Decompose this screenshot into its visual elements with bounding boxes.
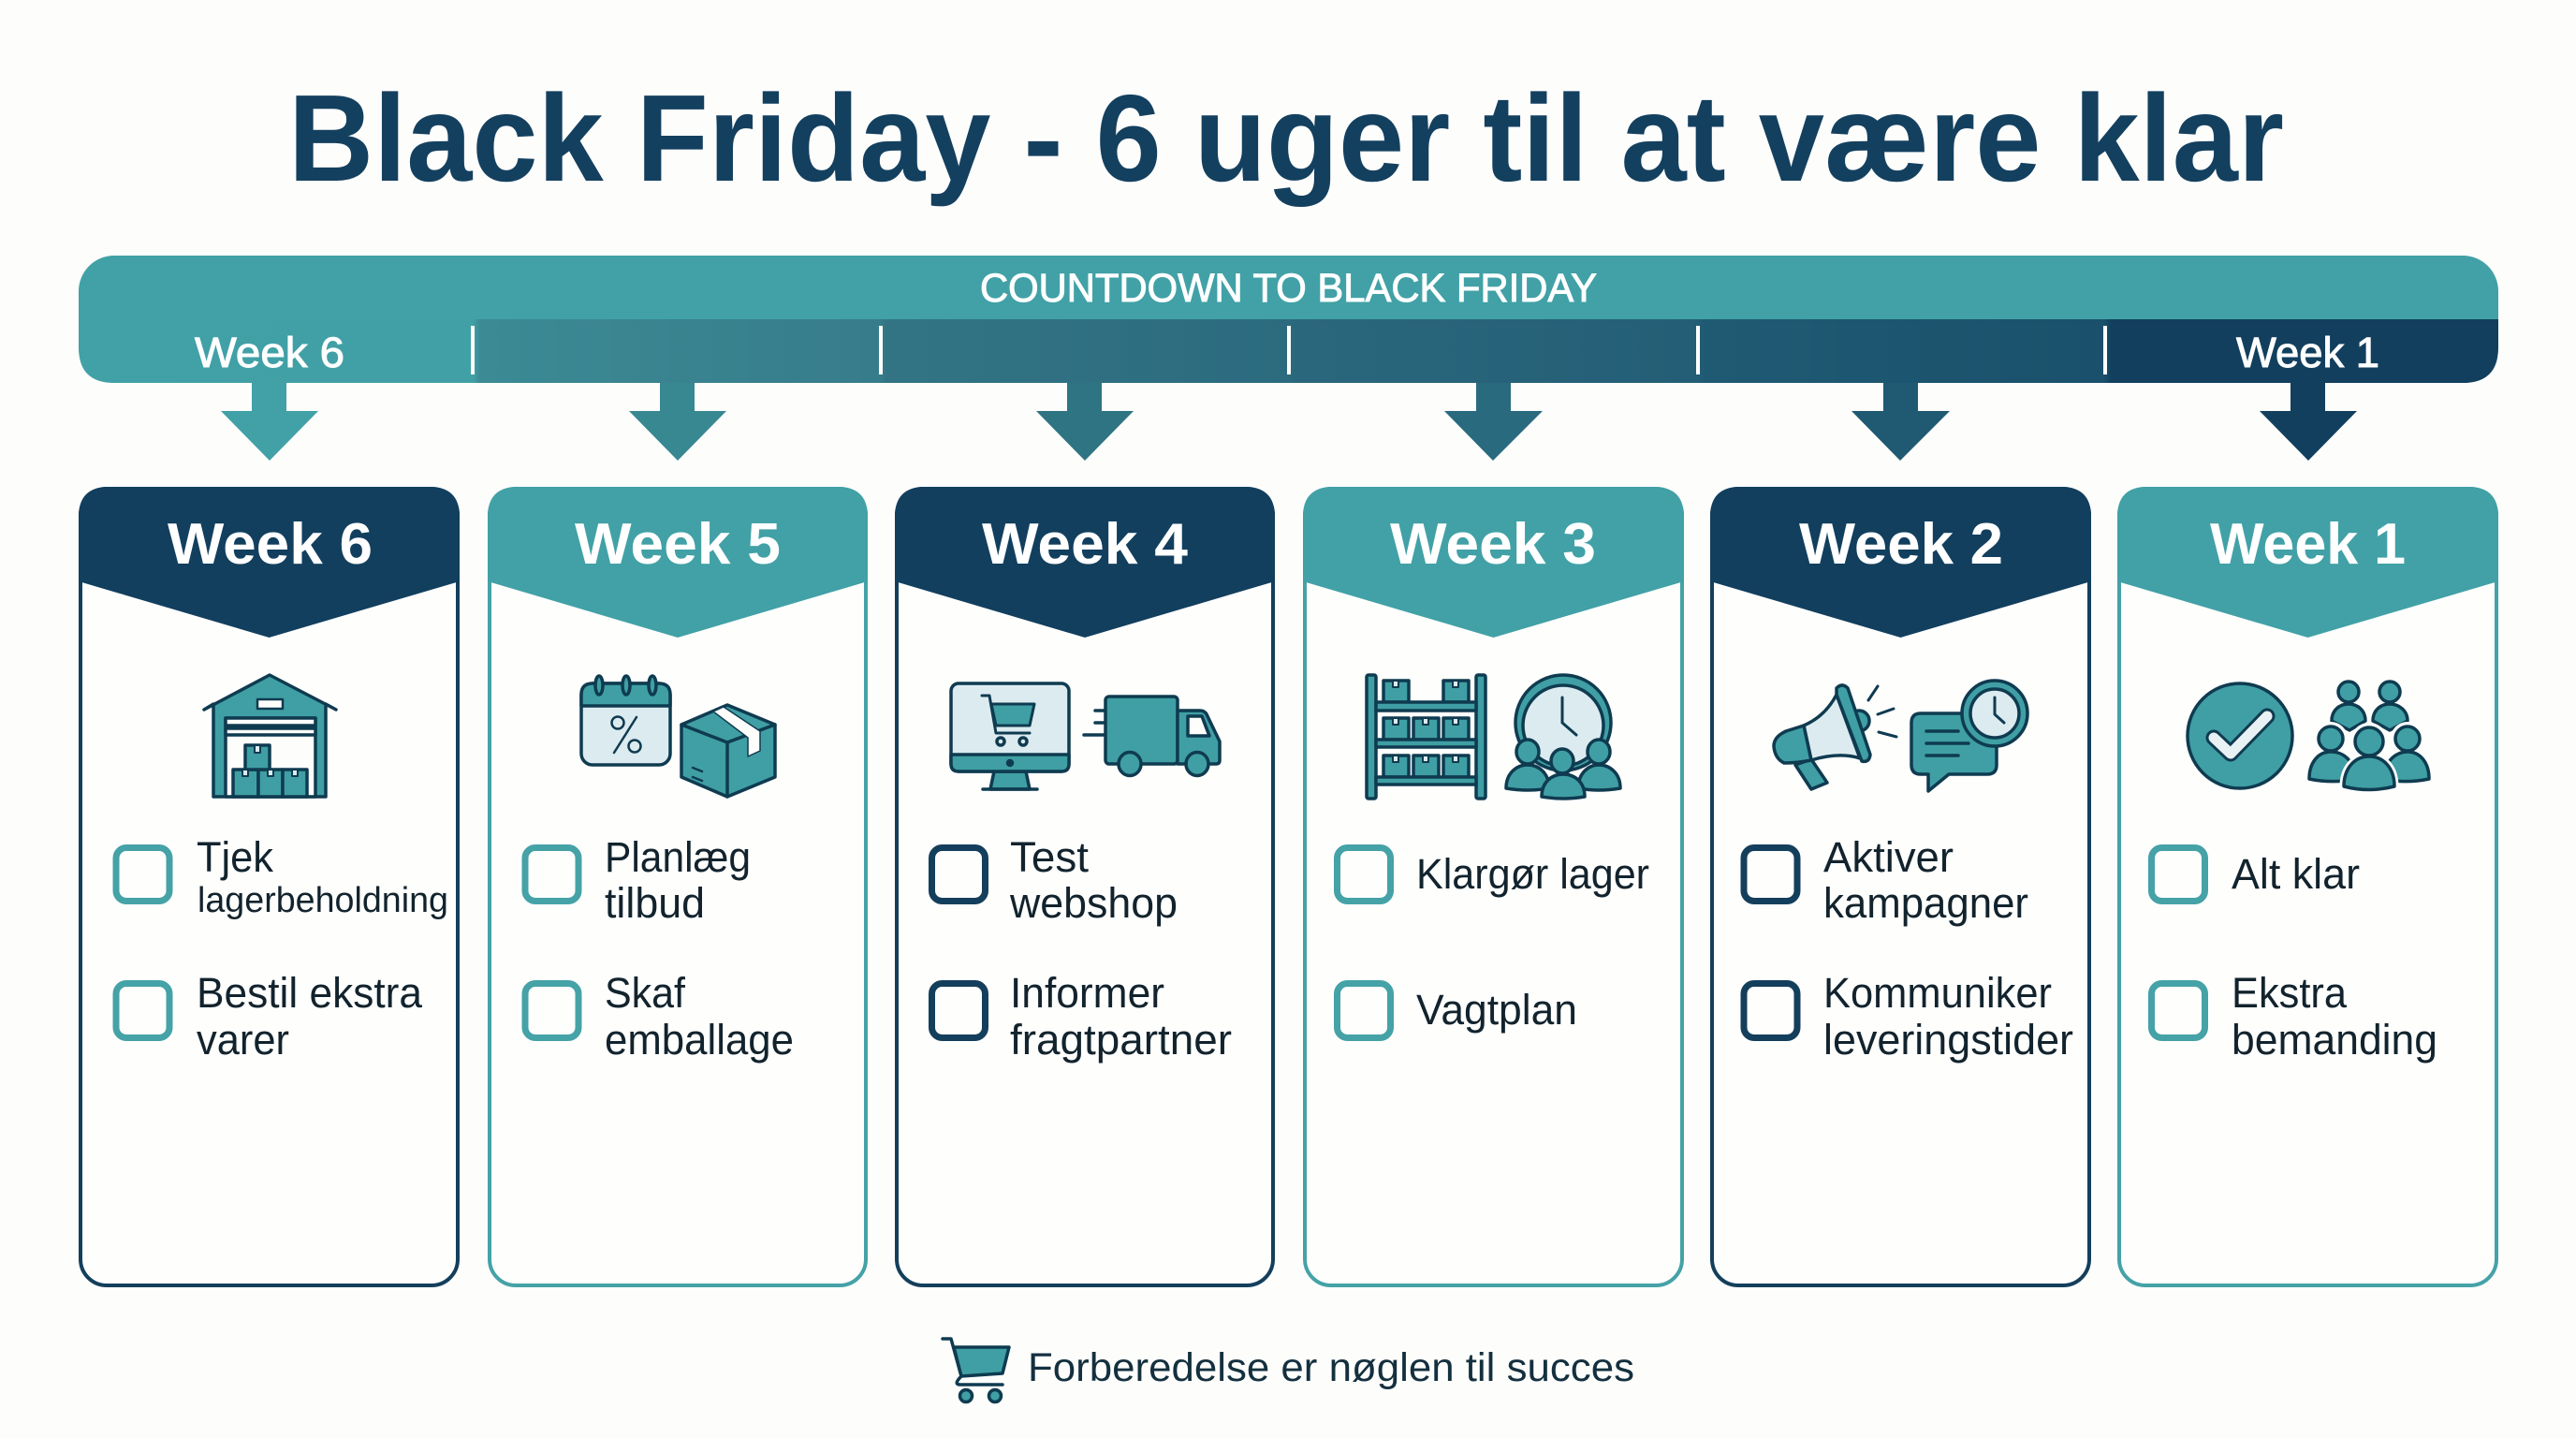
- icon: webshop and truck: [951, 683, 1220, 789]
- task: [2232, 969, 2437, 1064]
- task: leveringstider: [1823, 1016, 2073, 1064]
- checkbox: [1744, 983, 1797, 1037]
- task: [605, 969, 794, 1064]
- task: webshop: [1009, 879, 1178, 927]
- checkbox: [932, 848, 985, 901]
- task: [1009, 833, 1178, 927]
- title: Black Friday - 6 uger til at være klar: [288, 69, 2284, 207]
- checkbox: [525, 848, 578, 901]
- task: Klargør lager: [1416, 850, 1649, 898]
- task: Tjek: [197, 833, 273, 881]
- task: Bestil ekstra: [197, 969, 423, 1017]
- heading: Week 5: [575, 512, 781, 577]
- checkbox: [525, 983, 578, 1037]
- task: [197, 969, 423, 1064]
- heading: Week 2: [1799, 512, 2003, 577]
- panel: week 1: [2117, 487, 2498, 1285]
- task: Vagtplan: [1416, 986, 1577, 1034]
- checkbox: [116, 848, 169, 901]
- bar heading: COUNTDOWN TO BLACK FRIDAY: [980, 266, 1597, 311]
- panel: week 5: [488, 487, 868, 1285]
- icon: shelves and clock team: [1367, 675, 1620, 799]
- arrow: week 3: [1444, 383, 1543, 461]
- bar label: week 1: Week 1: [2236, 329, 2379, 376]
- task: Aktiver: [1823, 833, 1954, 881]
- panel: week 2: [1710, 487, 2091, 1285]
- task: emballage: [605, 1016, 794, 1064]
- panel: week 3: [1303, 487, 1684, 1285]
- task: tilbud: [605, 879, 705, 927]
- task: Informer: [1010, 969, 1164, 1017]
- task: [605, 833, 751, 927]
- heading: Week 1: [2210, 512, 2406, 577]
- arrow: week 4: [1036, 383, 1134, 461]
- icon: cart: [943, 1339, 1009, 1402]
- checkbox: [932, 983, 985, 1037]
- checkbox: [116, 983, 169, 1037]
- icon: check and team: [2188, 682, 2429, 790]
- heading: Week 4: [982, 512, 1189, 577]
- task: Test: [1010, 833, 1090, 881]
- heading: Week 3: [1390, 512, 1596, 577]
- checkbox: [2151, 848, 2205, 901]
- task: kampagner: [1823, 879, 2028, 927]
- panel: week 4: [895, 487, 1275, 1285]
- task: Alt klar: [2232, 850, 2360, 898]
- checkbox: [1337, 983, 1391, 1037]
- task: lagerbeholdning: [198, 881, 448, 920]
- footer: [943, 1339, 1634, 1402]
- checkbox: [1337, 848, 1391, 901]
- arrow: week 2: [1852, 383, 1950, 461]
- task: varer: [197, 1016, 289, 1064]
- task: Ekstra: [2232, 969, 2348, 1017]
- arrow: week 1: [2260, 383, 2357, 461]
- arrow: week 5: [629, 383, 726, 461]
- heading: Week 6: [168, 512, 373, 577]
- checkbox: [2151, 983, 2205, 1037]
- task: fragtpartner: [1010, 1016, 1232, 1064]
- checkbox: [1744, 848, 1797, 901]
- icon: megaphone and message: [1774, 681, 2027, 791]
- icon: warehouse: [204, 675, 336, 797]
- task: [197, 833, 448, 920]
- task: Planlæg: [605, 833, 751, 881]
- task: Kommuniker: [1823, 969, 2052, 1017]
- task: [1010, 969, 1232, 1064]
- icon: calendar and box: [581, 676, 775, 797]
- task: bemanding: [2232, 1016, 2437, 1064]
- task: Skaf: [605, 969, 685, 1017]
- countdown bar: [79, 256, 2498, 383]
- task: [1823, 833, 2028, 927]
- bar label: week 6: Week 6: [195, 329, 344, 376]
- tagline: Forberedelse er nøglen til succes: [1028, 1345, 1634, 1390]
- panel: week 6: [79, 487, 460, 1285]
- arrow: week 6: [221, 383, 318, 461]
- task: [1823, 969, 2073, 1064]
